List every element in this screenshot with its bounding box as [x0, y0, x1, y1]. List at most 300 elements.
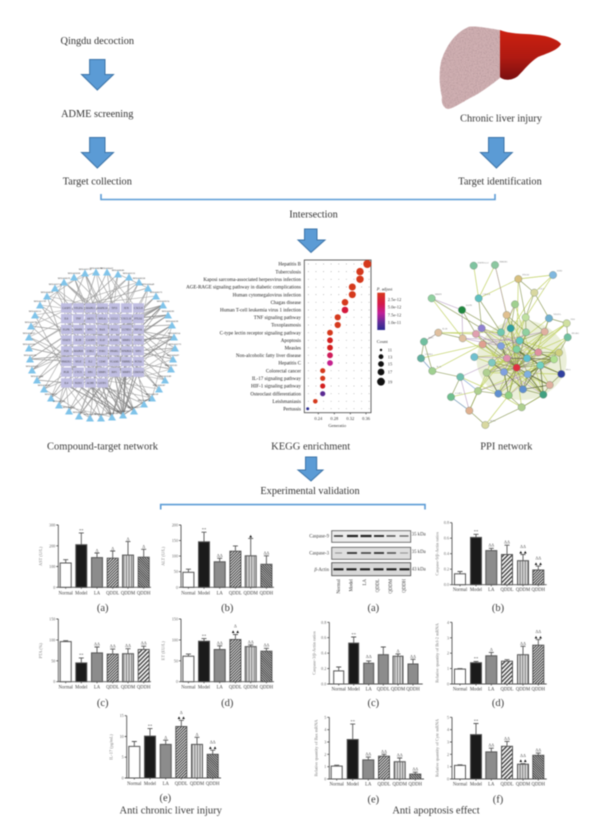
- compound labels: MOL004891: [95, 413, 108, 416]
- compound labels: MOL000417: [128, 406, 141, 409]
- x axis: 0.32: [346, 416, 354, 421]
- pathway labels: Human cytomegalovirus infection: [233, 293, 301, 298]
- pathway labels: HIF-1 signaling pathway: [251, 385, 301, 390]
- compound labels: MOL000449: [142, 283, 155, 286]
- bar chart: Bax mRNA: 3: [324, 740, 326, 744]
- bar chart: ALT: ▲: [248, 533, 253, 538]
- bar chart: ET: ΔΔ: [263, 643, 269, 648]
- bar chart: ET: ΔΔ: [217, 641, 223, 646]
- text: Anti apoptosis effect: Anti apoptosis effect: [392, 806, 480, 816]
- arrow: liver injury to target identification: [480, 138, 512, 168]
- node labels: ESR1: [557, 270, 563, 273]
- bar chart: PTA: [38, 616, 151, 690]
- pathway labels: TNF signaling pathway: [254, 316, 301, 321]
- text: KEGG enrichment: KEGG enrichment: [271, 442, 350, 452]
- legend: count: 11: [388, 348, 392, 353]
- bar chart: Bax mRNA: [313, 715, 424, 788]
- bar chart: Bax mRNA: ΔΔ: [381, 749, 387, 754]
- bar chart: AST: Δ: [111, 546, 114, 551]
- bar chart: IL-17: QDDH: [206, 782, 220, 787]
- bar chart: Caspase-3 ratio: ΔΔ: [366, 654, 372, 659]
- x axis: 0.28: [330, 416, 339, 421]
- plot background dots: [308, 264, 370, 409]
- bar chart: Bcl-2 mRNA: 2: [447, 651, 449, 656]
- bar chart: Bcl-2 mRNA: 3: [447, 635, 449, 640]
- bar chart: Caspase-3 ratio: 0.0: [321, 682, 326, 686]
- bar chart: Cytc mRNA: ΔΔ: [504, 736, 510, 741]
- compound labels: MOL000354: [168, 332, 181, 335]
- pathway labels: Pertussis: [283, 407, 301, 412]
- bar chart: IL-17: 0: [122, 776, 124, 780]
- target labels: MMP3: [122, 371, 131, 374]
- nodes: [417, 261, 571, 429]
- bar chart: Bax mRNA: Normal: [330, 782, 345, 788]
- node labels: EGFR: [466, 304, 472, 307]
- bar chart: PTA: QDDM: [121, 686, 136, 691]
- node labels: FOS: [571, 318, 576, 321]
- compound labels: MOL000676: [58, 277, 71, 280]
- target labels: TNF: [76, 318, 81, 321]
- caption: (c) right: (c): [367, 698, 380, 709]
- caption: (d) right: (d): [492, 698, 505, 709]
- bar chart: ET: QDDM: [244, 686, 259, 691]
- bar chart: ALT: 200: [172, 522, 178, 527]
- bar chart: PTA: PTA (%): [38, 642, 43, 658]
- target labels: MMP1: [98, 371, 107, 374]
- bar chart: Caspase-9 ratio: [434, 520, 547, 593]
- bar chart: IL-17: Δ: [164, 735, 167, 740]
- x axis: 0.36: [362, 416, 371, 421]
- bar chart: PTA: ΔΔ: [94, 642, 100, 647]
- bar chart: Bcl-2 mRNA: 0: [447, 682, 449, 686]
- bar chart: PTA: ΔΔ: [141, 641, 147, 646]
- bar chart: Caspase-3 ratio: Model: [348, 688, 361, 692]
- compound labels: MOL001484: [31, 375, 44, 378]
- compound labels: MOL002263: [23, 343, 36, 346]
- bar chart: IL-17: Δ: [196, 732, 199, 737]
- bar chart: Cytc mRNA: ΔΔ: [535, 748, 541, 752]
- caption: (b) right: (b): [492, 603, 505, 614]
- legend: count: 19: [388, 379, 393, 384]
- caption: (f): (f): [493, 794, 504, 806]
- pathway labels: Measles: [285, 346, 301, 351]
- text: Intersection: Intersection: [289, 210, 338, 220]
- pathway labels: Human T-cell leukemia virus 1 infection: [220, 309, 301, 314]
- target labels: MMP9: [74, 328, 83, 331]
- compound labels: MOL004959: [41, 291, 54, 294]
- pathway labels: AGE-RAGE signaling pathway in diabetic complications: [186, 286, 301, 291]
- text: Anti chronic liver injury: Anti chronic liver injury: [120, 806, 223, 816]
- bar chart: Caspase-9 ratio: 0.4: [444, 551, 449, 556]
- legend: p adjust: 1.0e-11: [388, 320, 401, 325]
- edges purple: [421, 265, 554, 411]
- bar chart: Caspase-9 ratio: 0.2: [444, 567, 449, 572]
- text: Target identification: Target identification: [458, 176, 542, 188]
- bar chart: Bcl-2 mRNA: [434, 620, 547, 692]
- blot lane labels: QDDL: [376, 579, 381, 592]
- blot row labels: 35 kDa: [412, 533, 427, 538]
- node labels: MMP9: [435, 293, 442, 296]
- target labels: CXCL10: [121, 318, 132, 321]
- blot lane labels: Normal: [337, 578, 342, 594]
- bar chart: ALT: ΔΔ: [217, 553, 223, 558]
- bar chart: AST: Δ: [127, 536, 130, 541]
- pathway labels: [186, 263, 302, 412]
- target labels: CCND1: [122, 328, 131, 331]
- bar chart: IL-17: ΔΔ: [210, 740, 216, 744]
- caption: (c): (c): [97, 698, 109, 709]
- target labels: AKT1: [87, 318, 94, 321]
- bar chart: ALT: 100: [172, 554, 178, 559]
- text: Qingdu decoction: Qingdu decoction: [61, 36, 134, 47]
- legend: p adjust: [376, 286, 401, 330]
- bar chart: Caspase-3 ratio: ΔΔ: [410, 654, 416, 659]
- compound labels: MOL000497: [167, 354, 180, 357]
- bar chart: AST: 0: [53, 585, 55, 590]
- compound labels: MOL005828: [68, 272, 81, 275]
- western blot: [309, 531, 427, 594]
- bar chart: Caspase-3 ratio: Δ: [397, 648, 400, 654]
- arrow: ADME to target collection: [82, 138, 114, 168]
- bar chart: IL-17: 5: [122, 755, 124, 760]
- bar chart: ALT: Model: [198, 591, 211, 596]
- bar chart: Caspase-3 ratio: LA: [366, 688, 372, 692]
- bar chart: Cytc mRNA: [434, 715, 547, 788]
- bar chart: IL-17: Δ: [180, 710, 183, 715]
- bar chart: IL-17: Model: [144, 782, 157, 787]
- bar chart: Cytc mRNA: Normal: [453, 782, 468, 788]
- compound labels: MOL000006: [112, 269, 125, 272]
- bar chart: Caspase-3 ratio: 0.2: [321, 666, 326, 671]
- bar chart: ET: 150: [172, 617, 178, 622]
- target labels: NOS2: [135, 339, 142, 342]
- blot row labels: [309, 533, 427, 573]
- bar chart: ALT: Normal: [181, 591, 196, 596]
- bar chart: Caspase-9 ratio: QDDM: [516, 588, 531, 593]
- legend: p adjust: 2.5e-12: [388, 297, 401, 302]
- bar chart: Cytc mRNA: ΔΔ: [488, 743, 494, 748]
- compound labels: MOL000422: [101, 267, 114, 270]
- bar chart: Bcl-2 mRNA: QDDL: [500, 688, 514, 692]
- bar chart: Cytc mRNA: LA: [488, 782, 495, 788]
- pathway labels: Osteoclast differentiation: [250, 392, 301, 397]
- target labels: MMP2: [122, 339, 131, 342]
- text: Target collection: Target collection: [63, 176, 132, 188]
- compound labels: MOL000387: [153, 384, 166, 387]
- bar chart: ET: 100: [172, 637, 178, 642]
- legend: count: 17: [388, 370, 393, 375]
- target labels: NFKBIA: [121, 350, 131, 353]
- node labels: HSP90AA1: [478, 261, 490, 264]
- bar chart: Bcl-2 mRNA: QDDH: [532, 688, 546, 692]
- bar chart: ET: ΔΔ: [248, 640, 254, 645]
- bar chart: Caspase-3 ratio: 0.4: [321, 651, 326, 656]
- bar chart: ET: **: [202, 633, 207, 638]
- bar chart: IL-17: [109, 710, 221, 787]
- bar chart: ET: Model: [198, 686, 211, 691]
- pathway labels: Toxoplasmosis: [271, 324, 301, 329]
- bar chart: Bax mRNA: Relative quantity of Bax mRNA: [313, 719, 318, 776]
- blot: Caspase-3: [332, 547, 411, 559]
- node labels: CASP3: [455, 392, 463, 395]
- bar chart: PTA: QDDH: [137, 686, 151, 691]
- pathway labels: Colorectal cancer: [266, 369, 301, 374]
- bar chart: Bax mRNA: 1: [324, 764, 326, 769]
- compound labels: MOL004328: [166, 320, 179, 323]
- node labels: BCL2: [490, 420, 497, 423]
- target labels: GSTP1: [98, 382, 107, 385]
- bar chart: Bax mRNA: **: [350, 719, 356, 724]
- bar chart: Caspase-9 ratio: 0.6: [444, 536, 449, 541]
- blot lane labels: [337, 578, 407, 594]
- text: Chronic liver injury: Chronic liver injury: [460, 114, 543, 124]
- bar chart: AST: [38, 522, 151, 596]
- edges blue: [421, 358, 478, 411]
- target labels: CASP9: [86, 339, 95, 342]
- bar chart: Caspase-9 ratio: 0.8: [444, 520, 449, 525]
- blot lane labels: QDDH: [402, 578, 407, 593]
- bar chart: ET: LA: [217, 686, 223, 691]
- compound labels: MOL003896: [84, 413, 97, 416]
- bar chart: Bcl-2 mRNA: ▲▲: [534, 634, 543, 639]
- target labels: CCL2: [111, 318, 118, 321]
- caption: (a) right: (a): [367, 603, 380, 614]
- blot lane labels: QDDM: [389, 578, 394, 594]
- panel: KEGG dot plot: [186, 260, 401, 428]
- text: ADME screening: ADME screening: [61, 109, 133, 120]
- bar chart: AST: LA: [94, 591, 101, 596]
- bar chart: AST: **: [79, 528, 84, 533]
- bar chart: IL-17: 10: [120, 734, 124, 739]
- pathway labels: Leishmaniasis: [272, 400, 301, 405]
- blot row labels: Caspase-3: [309, 552, 330, 557]
- bar chart: ALT: 50: [174, 569, 178, 574]
- bar chart: Caspase-9 ratio: QDDH: [532, 588, 546, 593]
- blot: beta-actin: [332, 563, 411, 576]
- target grid: [61, 308, 144, 383]
- target labels: ESR1: [99, 350, 106, 353]
- target labels: HIF1A: [134, 328, 142, 331]
- bar chart: Caspase-3 ratio: QDDH: [406, 688, 420, 692]
- extra edges: [29, 272, 175, 418]
- compound labels: MOL000239: [146, 393, 159, 396]
- bar chart: Bcl-2 mRNA: 1: [447, 666, 449, 671]
- bar chart: Bax mRNA: QDDL: [377, 782, 391, 788]
- bar chart: ET: ET (EU/L): [160, 641, 166, 660]
- compound triangles: [25, 268, 179, 422]
- x axis: [314, 413, 371, 428]
- panel: PPI network: [417, 261, 579, 429]
- bar chart: AST: 300: [49, 522, 55, 527]
- caption: (e): (e): [159, 793, 172, 804]
- bar chart: AST: Δ: [96, 548, 99, 553]
- pathway labels: Hepatitis C: [278, 362, 302, 367]
- target labels: MAPK14: [97, 307, 108, 310]
- bar chart: Bcl-2 mRNA: Model: [470, 688, 483, 692]
- pathway labels: Kaposi sarcoma-associated herpesvirus infection: [203, 278, 301, 283]
- bar chart: ET: 0: [176, 679, 178, 684]
- pathway labels: Hepatitis B: [278, 263, 302, 268]
- compound labels: MOL000359: [53, 400, 66, 403]
- bar chart: ET: [160, 616, 274, 690]
- bracket: experimental validation: [161, 505, 425, 510]
- target labels: HMOX1: [62, 360, 72, 364]
- bar chart: Bcl-2 mRNA: 4: [447, 620, 449, 625]
- bar chart: AST: AST (U/L): [38, 546, 43, 566]
- target labels: PPARG: [110, 350, 119, 353]
- bar chart: IL-17: QDDM: [190, 782, 205, 787]
- pathway labels: Tuberculosis: [275, 270, 301, 275]
- bar chart: Bcl-2 mRNA: ΔΔ: [535, 629, 541, 634]
- target labels: MYC: [87, 328, 94, 331]
- node labels: CXCL8: [483, 293, 491, 296]
- bar chart: IL-17: ▲▲: [208, 745, 217, 750]
- bar chart: ALT: LA: [217, 591, 223, 596]
- bar chart: ALT: QDDL: [229, 591, 242, 596]
- target labels: JUN: [124, 307, 129, 310]
- bar chart: Cytc mRNA: 2: [447, 752, 449, 757]
- blot lane labels: LA: [363, 578, 368, 585]
- bracket: intersection: [101, 194, 495, 200]
- target labels: EGFR: [63, 328, 70, 331]
- blot lane labels: Model: [350, 578, 354, 592]
- target labels: PGR: [64, 371, 69, 374]
- node labels: TP53: [565, 369, 571, 372]
- bar chart: AST: QDDH: [137, 591, 151, 596]
- bar chart: PTA: LA: [94, 686, 101, 691]
- arrow: intersection to analyses: [298, 229, 325, 252]
- bar chart: IL-17: 15: [120, 713, 124, 718]
- compound labels: MOL001792: [34, 300, 47, 303]
- text: Experimental validation: Experimental validation: [260, 486, 360, 497]
- bar chart: Cytc mRNA: 4: [447, 727, 449, 732]
- bar chart: Bax mRNA: ΔΔ: [365, 752, 371, 756]
- pathway labels: Chagas disease: [271, 301, 302, 306]
- bar chart: Bax mRNA: ΔΔ: [412, 766, 418, 772]
- pathway labels: IL-17 signaling pathway: [252, 377, 301, 382]
- bar chart: PTA: 150: [49, 617, 55, 622]
- caption: (e) right: (e): [367, 794, 380, 806]
- bar chart: Bax mRNA: QDDM: [393, 782, 408, 788]
- bar chart: Caspase-9 ratio: ΔΔ: [504, 540, 510, 545]
- bar chart: Caspase-9 ratio: **: [474, 529, 479, 534]
- target labels: IL4: [64, 382, 69, 385]
- bar chart: Caspase-3 ratio: [311, 620, 423, 692]
- target labels: SELE: [75, 360, 82, 364]
- compound labels: MOL000173: [150, 291, 163, 294]
- bar chart: Caspase-9 ratio: ΔΔ: [535, 556, 541, 561]
- target labels: NOS3: [75, 382, 82, 385]
- bar chart: AST: 100: [49, 564, 55, 569]
- bar chart: PTA: 50: [51, 658, 55, 663]
- legend: p adjust: P. adjust: [376, 286, 393, 292]
- target labels: RELA: [99, 318, 106, 321]
- target labels: MAPK8: [74, 350, 84, 353]
- bar chart: Bax mRNA: 2: [324, 752, 326, 757]
- compound labels: MOL002135: [123, 272, 136, 275]
- target labels: CD40: [99, 360, 106, 364]
- target labels: IRF1: [112, 371, 118, 374]
- compound labels: MOL000096: [38, 384, 51, 387]
- blot row labels: β-Actin: [313, 568, 330, 573]
- bar chart: IL-17: LA: [163, 782, 169, 787]
- bar chart: ET: Δ: [234, 624, 237, 629]
- target labels: ACHE: [87, 382, 94, 385]
- bar chart: ALT: ΔΔ: [263, 550, 269, 555]
- compound labels: MOL000392: [162, 310, 175, 313]
- pathway labels: Apoptosis: [281, 339, 301, 344]
- bar chart: Cytc mRNA: Model: [470, 782, 483, 788]
- bar chart: AST: Model: [75, 591, 88, 596]
- arrow: to experimental validation: [298, 457, 323, 481]
- bar chart: Caspase-9 ratio: ▲▲: [518, 549, 528, 554]
- bar chart: AST: Normal: [59, 591, 74, 596]
- pathway labels: C-type lectin receptor signaling pathway: [220, 331, 301, 336]
- bar chart: Bax mRNA: ΔΔ: [397, 752, 403, 758]
- edges green: [421, 265, 568, 425]
- edges olive: [421, 279, 568, 425]
- bar chart: AST: Δ: [142, 544, 145, 549]
- bar chart: Cytc mRNA: 3: [447, 740, 449, 744]
- bar chart: Caspase-9 ratio: LA: [488, 588, 495, 593]
- bar chart: IL-17: ▲▲: [177, 715, 186, 720]
- bar chart: Bax mRNA: 5: [324, 715, 326, 720]
- panel: compound-target network: [23, 267, 182, 422]
- target labels: SPP1: [135, 350, 142, 353]
- bar chart: IL-17: QDDL: [175, 782, 188, 787]
- bar chart: Bax mRNA: LA: [365, 782, 372, 788]
- target labels: CDKN1A: [133, 371, 144, 374]
- caption: (b): (b): [221, 603, 234, 614]
- target labels: FOS: [64, 350, 69, 353]
- compound labels: MOL002674: [157, 300, 170, 303]
- x axis: 0.24: [314, 416, 323, 421]
- bar chart: Cytc mRNA: QDDH: [532, 782, 546, 788]
- text: Compound-target network: Compound-target network: [47, 442, 159, 452]
- bar chart: PTA: 0: [53, 679, 55, 684]
- target labels: IL6: [64, 318, 69, 321]
- compound labels: MOL000500: [106, 412, 119, 415]
- compound labels: MOL000378: [138, 399, 151, 402]
- target labels: IL10: [100, 339, 106, 342]
- plot frame: [304, 260, 371, 413]
- network edges: [29, 272, 175, 418]
- compound labels: MOL004961: [117, 410, 130, 413]
- target labels: CASP3: [62, 307, 71, 310]
- bar chart: AST: QDDM: [121, 591, 136, 596]
- target labels: BCL2: [111, 328, 118, 331]
- bar chart: ET: Normal: [181, 686, 196, 691]
- compound labels: MOL000131: [29, 310, 42, 313]
- icon: liver: [440, 26, 561, 109]
- target labels: CYCS: [75, 371, 82, 374]
- target labels: BAX: [99, 328, 105, 331]
- bar chart: Caspase-3 ratio: QDDM: [391, 688, 406, 692]
- bar chart: ET: QDDL: [229, 686, 242, 691]
- legend: p adjust: 7.5e-12: [388, 312, 401, 318]
- compound labels: MOL000472: [26, 365, 39, 368]
- bar chart: AST: QDDL: [106, 591, 119, 596]
- bar chart: Caspase-9 ratio: 0.0: [444, 582, 449, 587]
- compound labels: MOL002565: [165, 364, 178, 367]
- target labels: PTGS2: [134, 318, 143, 321]
- compound labels: MOL000228: [24, 354, 37, 357]
- bar chart: PTA: **: [79, 653, 84, 658]
- bar chart: Bax mRNA: 4: [324, 727, 326, 732]
- bar chart: PTA: Normal: [59, 686, 74, 691]
- bar chart: ALT: 150: [172, 538, 178, 543]
- bar chart: ET: 50: [174, 658, 178, 663]
